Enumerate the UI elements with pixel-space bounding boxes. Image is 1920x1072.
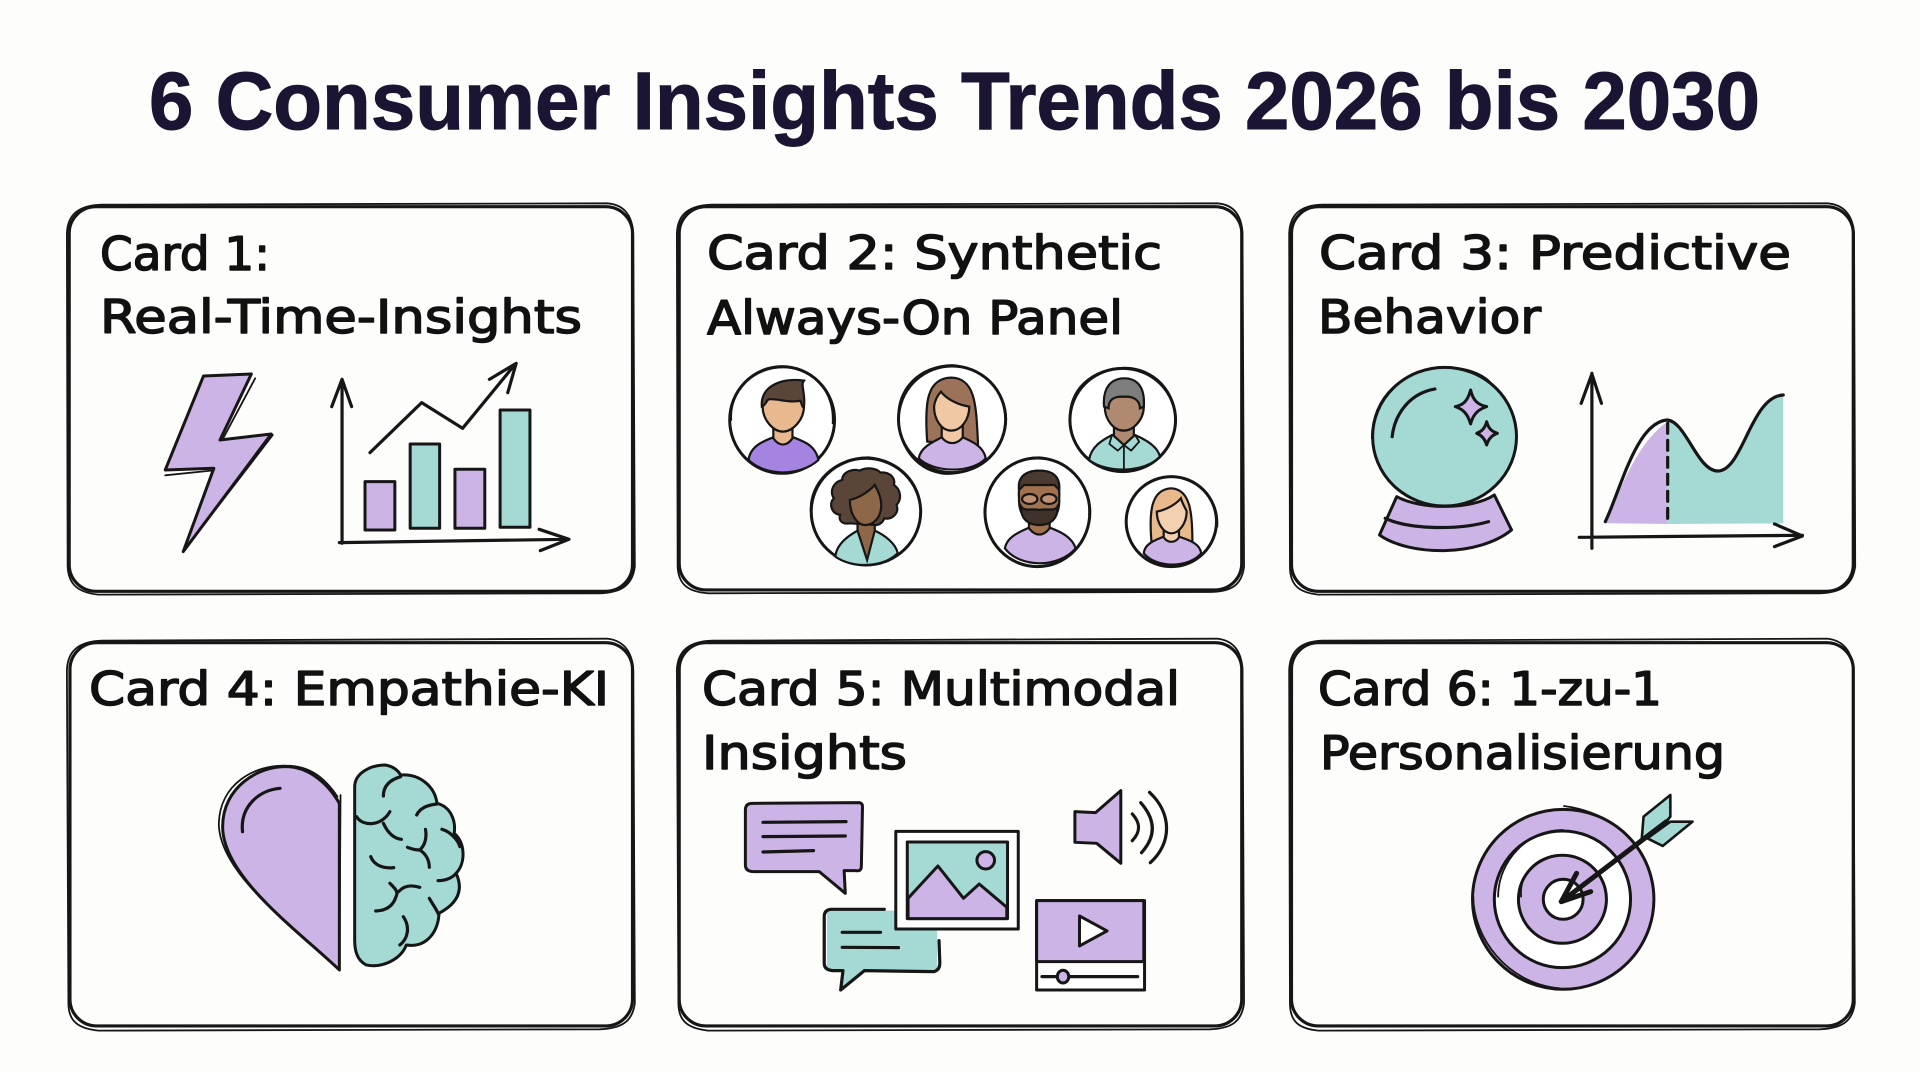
card 2 heading: Always-On Panel	[707, 291, 1123, 345]
panel: card 1 real-time insights	[67, 203, 635, 595]
avatar: man with brown hair	[730, 367, 835, 473]
bar chart with trend arrow	[332, 363, 569, 551]
icon: picture frame	[896, 831, 1018, 929]
card 5 heading: Card 5: Multimodal	[702, 662, 1180, 716]
panel: card 5 multimodal insights	[677, 639, 1244, 1031]
avatar: woman with long brown hair	[898, 365, 1006, 474]
avatar: man with glasses and beard	[985, 457, 1090, 567]
icon: teal speech bubble	[824, 909, 940, 990]
card 1 heading: Real-Time-Insights	[100, 290, 582, 344]
card 3 heading: Card 3: Predictive	[1319, 226, 1791, 280]
card 4 frame	[67, 639, 635, 1031]
card 6 frame	[1289, 639, 1855, 1031]
card 1 heading: Card 1:	[100, 227, 270, 281]
icon: purple speech bubble	[745, 803, 862, 893]
icon: crystal ball	[1372, 367, 1517, 551]
card 5 heading: Insights	[702, 726, 907, 780]
card 5 frame	[677, 639, 1244, 1031]
avatar group	[730, 365, 1217, 567]
card 3 frame	[1289, 203, 1855, 595]
card 4 heading: Card 4: Empathie-KI	[89, 662, 609, 716]
panel: card 4 empathie-KI	[67, 639, 635, 1031]
card 6 heading: Personalisierung	[1320, 726, 1725, 780]
icon: half heart	[219, 766, 341, 970]
icon: lightning bolt	[165, 374, 273, 552]
icon: video player	[1037, 901, 1145, 990]
card 2 heading: Card 2: Synthetic	[707, 226, 1162, 280]
title: 6 Consumer Insights Trends 2026 bis 2030	[149, 56, 1760, 147]
area chart with forecast split	[1579, 373, 1802, 548]
avatar: woman with blonde hair	[1126, 477, 1217, 567]
icon: target with arrow	[1472, 795, 1693, 989]
card 3 heading: Behavior	[1318, 290, 1541, 344]
icon: speaker	[1075, 791, 1167, 863]
icon: half brain	[355, 765, 463, 966]
panel: card 3 predictive behavior	[1289, 203, 1855, 595]
card 2 frame	[677, 203, 1244, 593]
card 6 heading: Card 6: 1-zu-1	[1318, 662, 1662, 716]
card 1 frame	[67, 203, 635, 595]
panel: card 2 synthetic always-on panel	[677, 203, 1244, 593]
avatar: man with grey hair and teal shirt	[1070, 368, 1176, 472]
avatar: woman with afro	[811, 457, 921, 565]
panel: card 6 1-zu-1 personalisierung	[1289, 639, 1855, 1031]
